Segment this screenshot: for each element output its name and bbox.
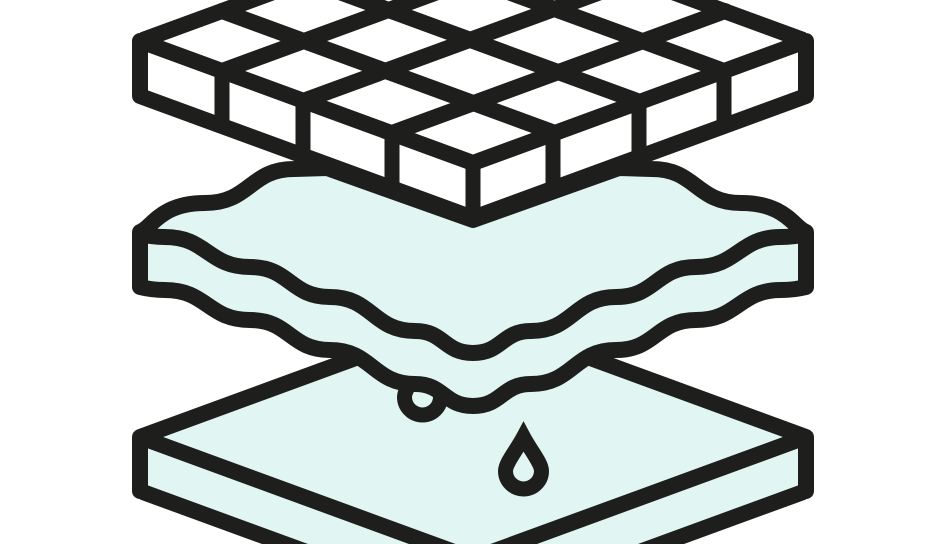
block fill: [140, 0, 806, 218]
front vertical dividers: [222, 71, 724, 218]
grid lines running down-right: [222, 0, 724, 133]
top layer: block divided into a 4x4 grid: [140, 0, 806, 218]
grid lines running up-right: [222, 0, 725, 133]
bottom layer: flat mint slab: [140, 315, 806, 544]
middle layer: wavy membrane: [140, 168, 806, 406]
icon: falling water drop: [506, 437, 542, 489]
block outline: [140, 0, 806, 218]
icon: water drop passing through the membrane: [404, 363, 440, 415]
